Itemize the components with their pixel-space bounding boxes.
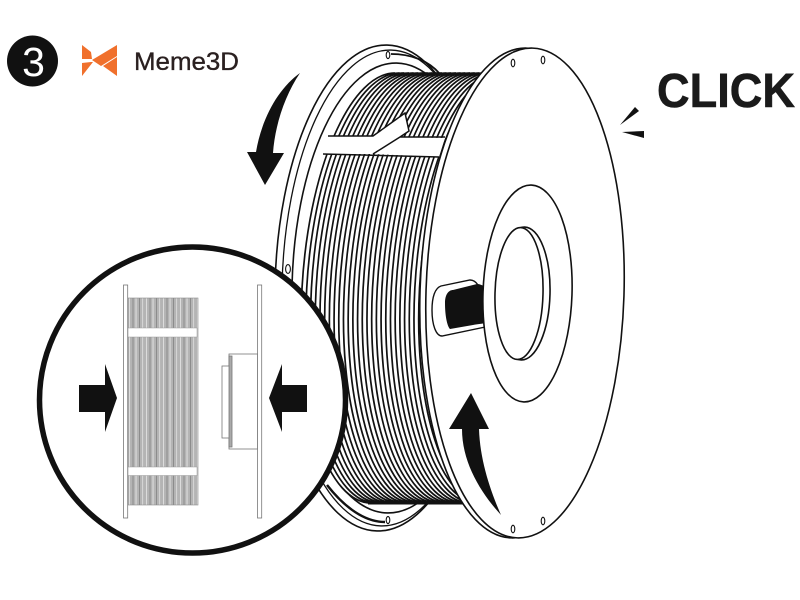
Meme3D logo xyxy=(82,45,239,76)
brand name: Meme3D xyxy=(134,48,239,76)
inset: side view detail xyxy=(40,247,346,553)
CLICK label: CLICK xyxy=(657,65,795,118)
locking pin xyxy=(432,280,490,336)
icon: orange logo mark xyxy=(82,45,117,76)
back flange xyxy=(270,43,497,533)
inset circle xyxy=(40,247,346,553)
left press arrow xyxy=(79,364,117,432)
front flange xyxy=(412,45,632,541)
click sound marks xyxy=(620,107,644,138)
white retaining strap xyxy=(323,113,445,157)
right flange with hub side view xyxy=(222,285,262,518)
filament spool illustration xyxy=(270,43,632,541)
rotation arrow: top xyxy=(247,73,300,185)
spool hub and centre hole xyxy=(479,184,576,403)
rotation arrow: bottom xyxy=(449,393,501,515)
right press arrow xyxy=(269,364,307,432)
filament windings xyxy=(290,73,531,503)
step number badge xyxy=(7,36,58,86)
step number badge: 3 xyxy=(22,39,45,85)
filament spool side view xyxy=(124,285,198,518)
